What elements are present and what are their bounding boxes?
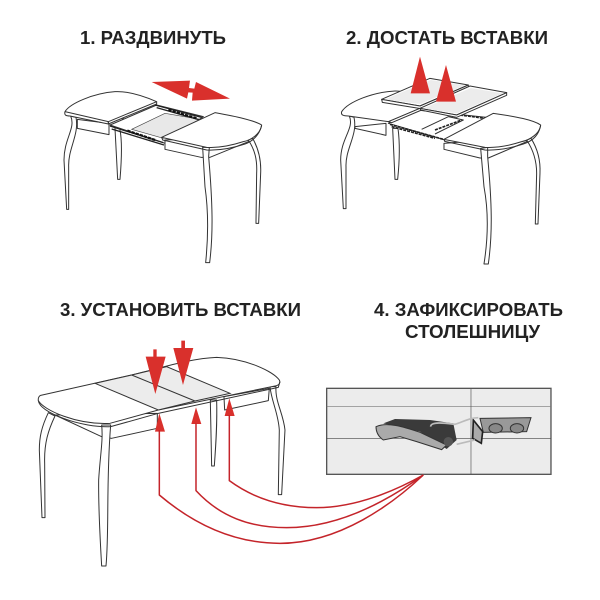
icon: red double arrow xyxy=(152,81,230,101)
icon: red up arrow 3 xyxy=(225,398,235,416)
icon: red up arrow right xyxy=(436,65,456,102)
icon: red down arrow right xyxy=(173,341,193,385)
title: step 4: 4. ЗАФИКСИРОВАТЬ xyxy=(374,300,563,320)
table 1: pulled apart xyxy=(64,81,262,263)
title: step 2: 2. ДОСТАТЬ ВСТАВКИ xyxy=(346,28,548,48)
icon: red up arrow 1 xyxy=(155,413,165,432)
title: step 4: СТОЛЕШНИЦУ xyxy=(405,322,541,342)
title: step 4 xyxy=(374,300,563,342)
icon: red up arrow left xyxy=(411,57,430,93)
icon: red up arrow 2 xyxy=(191,407,201,424)
table 2: inserts lifted out xyxy=(341,57,541,264)
latch detail panel xyxy=(327,388,551,474)
title: step 3: 3. УСТАНОВИТЬ ВСТАВКИ xyxy=(60,300,301,320)
red connector lines from latch to table xyxy=(159,415,423,543)
title: step 1: 1. РАЗДВИНУТЬ xyxy=(80,28,226,48)
icon: red down arrow left xyxy=(146,349,166,394)
table 3: inserts installed xyxy=(38,341,285,566)
